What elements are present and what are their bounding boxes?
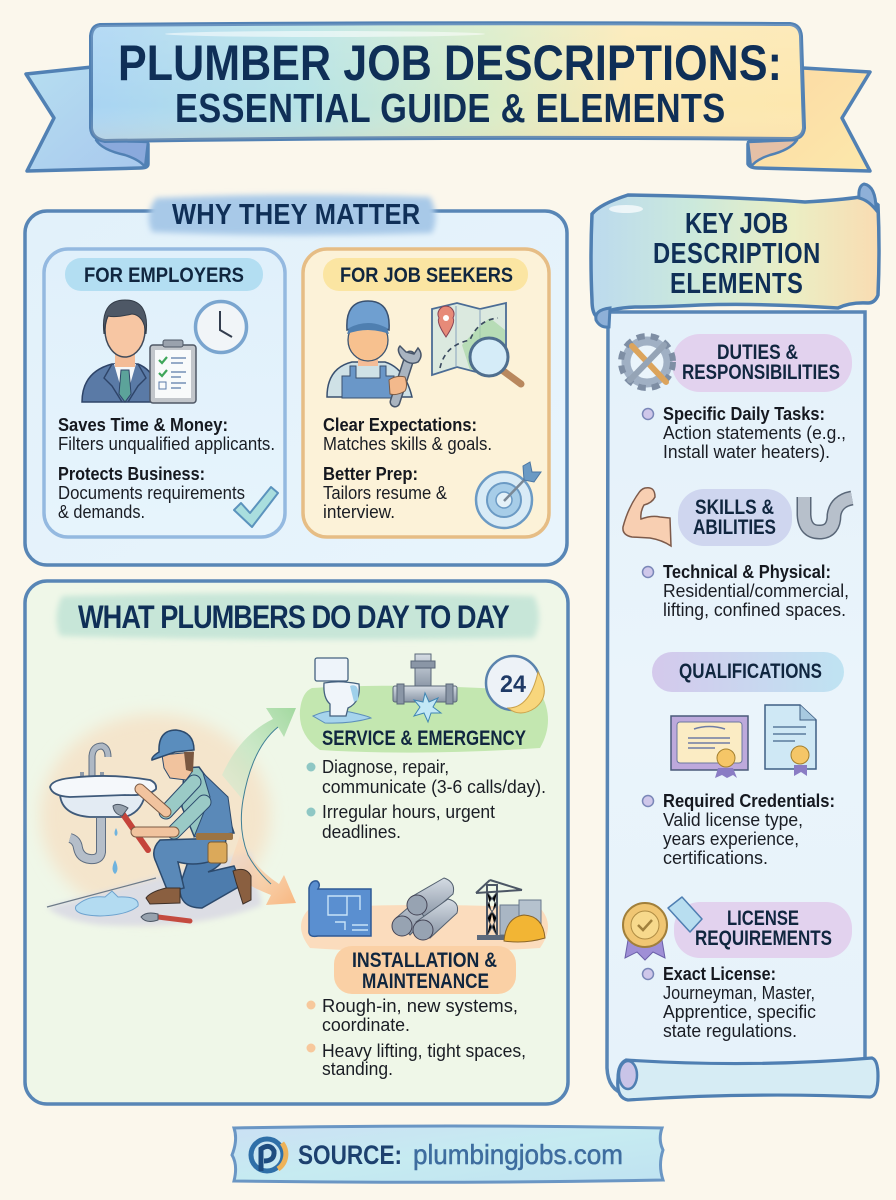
heading: key job: KEY JOB: [685, 207, 788, 240]
pill: for job seekers: FOR JOB SEEKERS: [340, 264, 513, 287]
text: clear expectations: [323, 415, 492, 454]
icon: check mark: [234, 487, 278, 527]
footer plaque: [232, 1126, 663, 1182]
scroll bottom roll: [618, 1058, 878, 1100]
front leg: [154, 838, 226, 892]
source url: plumbingjobs.com: [413, 1139, 623, 1170]
text: clear expectations: Matches skills & goals.: [323, 434, 492, 454]
illustration: plumber fixing leaking sink: [50, 727, 278, 921]
section: installation and maintenance: [301, 878, 548, 1079]
water drips: [112, 828, 118, 874]
back leg: [180, 838, 242, 908]
section: service and emergency: [300, 654, 548, 842]
illustration backdrop: [40, 714, 270, 926]
pill: for employers: [65, 258, 263, 291]
floor wrench: [141, 913, 190, 921]
bullet: specific daily tasks: Action statements (e.g.,: [663, 423, 846, 443]
bullet: technical and physical: Technical & Physical:: [663, 562, 831, 582]
heading: service and emergency: SERVICE & EMERGENCY: [322, 727, 526, 750]
panel: what plumbers do day to day: [25, 581, 568, 1104]
title line 1: PLUMBER JOB DESCRIPTIONS:: [118, 35, 782, 91]
upper arm: [140, 782, 194, 812]
card: for employers: [44, 249, 285, 537]
element: duties and responsibilities: [621, 334, 852, 462]
bullet: diagnose: communicate (3-6 calls/day).: [322, 777, 546, 797]
arrow: down to installation: [228, 835, 296, 905]
pill: license: LICENSE: [727, 907, 799, 930]
plumber figure: [113, 730, 251, 908]
bullet: technical and physical: lifting, confined spaces.: [663, 600, 846, 620]
overall bib: [194, 773, 233, 837]
icon: clock: [196, 302, 246, 352]
bullet: rough-in: coordinate.: [322, 1015, 410, 1035]
front boot: [146, 888, 180, 904]
icon: blueprint: [309, 881, 371, 936]
title banner: [26, 23, 870, 171]
ribbon tail left: [26, 67, 148, 171]
bullet: specific daily tasks: [642, 404, 846, 462]
panel background: [25, 581, 568, 1104]
panel background: [25, 211, 567, 565]
header banner: [591, 184, 879, 327]
bullet: required credentials: Required Credentials:: [663, 791, 835, 811]
heading: description: DESCRIPTION: [653, 237, 820, 270]
green blotch: [300, 686, 548, 753]
footer: source: [232, 1126, 663, 1182]
card: for job seekers: [303, 249, 549, 537]
pill: qualifications: [652, 652, 844, 692]
icon: construction crane and hard hat: [476, 880, 545, 942]
text: better prep: [323, 464, 447, 522]
bullet: technical and physical: Residential/commercial,: [663, 581, 849, 601]
pill: skills: SKILLS &: [695, 496, 774, 519]
bullet: exact license: [642, 964, 816, 1041]
icon: map with magnifier: [432, 303, 521, 384]
icon: flexed arm: [623, 488, 671, 546]
pill: duties: RESPONSIBILITIES: [682, 361, 840, 384]
bullet: heavy lifting: standing.: [322, 1059, 393, 1079]
icon: plumber portrait: [327, 301, 412, 398]
icon: clipboard: [150, 340, 196, 403]
pill: duties: DUTIES &: [717, 341, 798, 364]
back boot: [233, 869, 251, 904]
bullet: exact license: Journeyman, Master,: [663, 983, 815, 1003]
logo: [251, 1139, 286, 1171]
source label: SOURCE:: [298, 1140, 402, 1170]
bullet: diagnose: [306, 757, 546, 797]
icon: stacked pipes: [392, 878, 458, 940]
peach backdrop: [40, 714, 270, 918]
floor: [47, 852, 262, 926]
pill: qualifications: QUALIFICATIONS: [679, 660, 822, 683]
icon: award badge: [623, 903, 667, 960]
icon: p-trap pipe: [804, 497, 852, 532]
bullet: heavy lifting: Heavy lifting, tight spaces,: [322, 1041, 526, 1061]
icon: wrench: [389, 346, 421, 402]
title line 2: ESSENTIAL GUIDE & ELEMENTS: [175, 86, 725, 132]
bullet: rough-in: [306, 996, 518, 1035]
text: better prep: Better Prep:: [323, 464, 418, 484]
bullet: exact license: Apprentice, specific: [663, 1002, 816, 1022]
bullet: required credentials: certifications.: [663, 848, 768, 868]
icon: overflowing toilet: [313, 658, 371, 723]
bullet: heavy lifting: [306, 1041, 526, 1079]
drain pipe: [70, 818, 101, 859]
lower arm: [136, 802, 204, 832]
head: [162, 752, 193, 780]
icon: burst pipe: [393, 654, 457, 722]
icon: gear with tools: [621, 336, 673, 388]
icon: 24 hour clock: 24: [500, 671, 527, 698]
heading: what plumbers do day to day: [56, 593, 539, 640]
text: protects business: Protects Business:: [58, 464, 205, 484]
bullet: diagnose: Diagnose, repair,: [322, 757, 449, 777]
bullet: required credentials: years experience,: [663, 829, 799, 849]
bullet: exact license: state regulations.: [663, 1021, 797, 1041]
icon: price tag: [668, 897, 702, 932]
text: clear expectations: Clear Expectations:: [323, 415, 477, 435]
icon: target: [476, 462, 541, 528]
element: qualifications: [642, 652, 844, 868]
torso: [182, 767, 234, 836]
cap: [152, 730, 194, 760]
arrow guide line: [241, 727, 278, 884]
sink: [50, 746, 156, 817]
bullet: specific daily tasks: Specific Daily Tasks:: [663, 404, 825, 424]
text: protects business: [58, 464, 245, 522]
tool pouch: [208, 842, 227, 863]
bullet: rough-in: Rough-in, new systems,: [322, 996, 518, 1016]
text: saves time and money: [58, 415, 275, 454]
pill: license: [674, 902, 852, 958]
bullet: required credentials: [642, 791, 835, 868]
heading: installation and maintenance: MAINTENANCE: [362, 970, 489, 993]
bullet: irregular hours: [306, 802, 495, 842]
bullet: required credentials: Valid license type,: [663, 810, 803, 830]
bullet: irregular hours: Irregular hours, urgent: [322, 802, 495, 822]
bullet: technical and physical: [642, 562, 849, 620]
pill: for job seekers: [323, 258, 528, 291]
pill: for employers: FOR EMPLOYERS: [84, 264, 244, 287]
puddle: [76, 891, 138, 916]
bullet: specific daily tasks: Install water heaters).: [663, 442, 830, 462]
icon: document with seal: [765, 705, 816, 776]
element: license requirements: [623, 897, 852, 1041]
heading: what plumbers do day to day: WHAT PLUMBERS DO DAY TO DAY: [78, 600, 510, 636]
pill: skills: [678, 489, 792, 546]
element: skills and abilities: [623, 488, 852, 620]
text: protects business: Documents requirements: [58, 483, 245, 503]
scroll body: [607, 312, 865, 1094]
arrow: up to service: [222, 708, 296, 800]
heading: why they matter: WHY THEY MATTER: [172, 197, 420, 230]
icon: 24 hour clock: [486, 656, 544, 713]
pill: skills: ABILITIES: [693, 516, 776, 539]
panel: key job description elements scroll: [591, 184, 879, 1100]
text: saves time and money: Saves Time & Money:: [58, 415, 228, 435]
hair: [184, 752, 194, 772]
icon: businessman: [82, 300, 160, 402]
pill: duties: [672, 334, 852, 392]
ribbon tail right: [748, 68, 870, 171]
belt: [196, 833, 233, 840]
icon: certificate: [671, 716, 748, 778]
peach blotch: [301, 905, 548, 994]
text: saves time and money: Filters unqualified applicants.: [58, 434, 275, 454]
text: better prep: Tailors resume &: [323, 483, 447, 503]
pipe wrench: [113, 804, 148, 850]
heading: installation and maintenance: [352, 949, 497, 993]
heading: installation and maintenance: INSTALLATION &: [352, 949, 497, 972]
panel: why they matter: [25, 195, 567, 565]
heading: elements: ELEMENTS: [670, 267, 803, 300]
bullet: irregular hours: deadlines.: [322, 822, 401, 842]
text: protects business: & demands.: [58, 502, 145, 522]
text: better prep: interview.: [323, 502, 395, 522]
banner body: [91, 23, 804, 141]
pill: license: REQUIREMENTS: [695, 927, 832, 950]
bullet: exact license: Exact License:: [663, 964, 776, 984]
